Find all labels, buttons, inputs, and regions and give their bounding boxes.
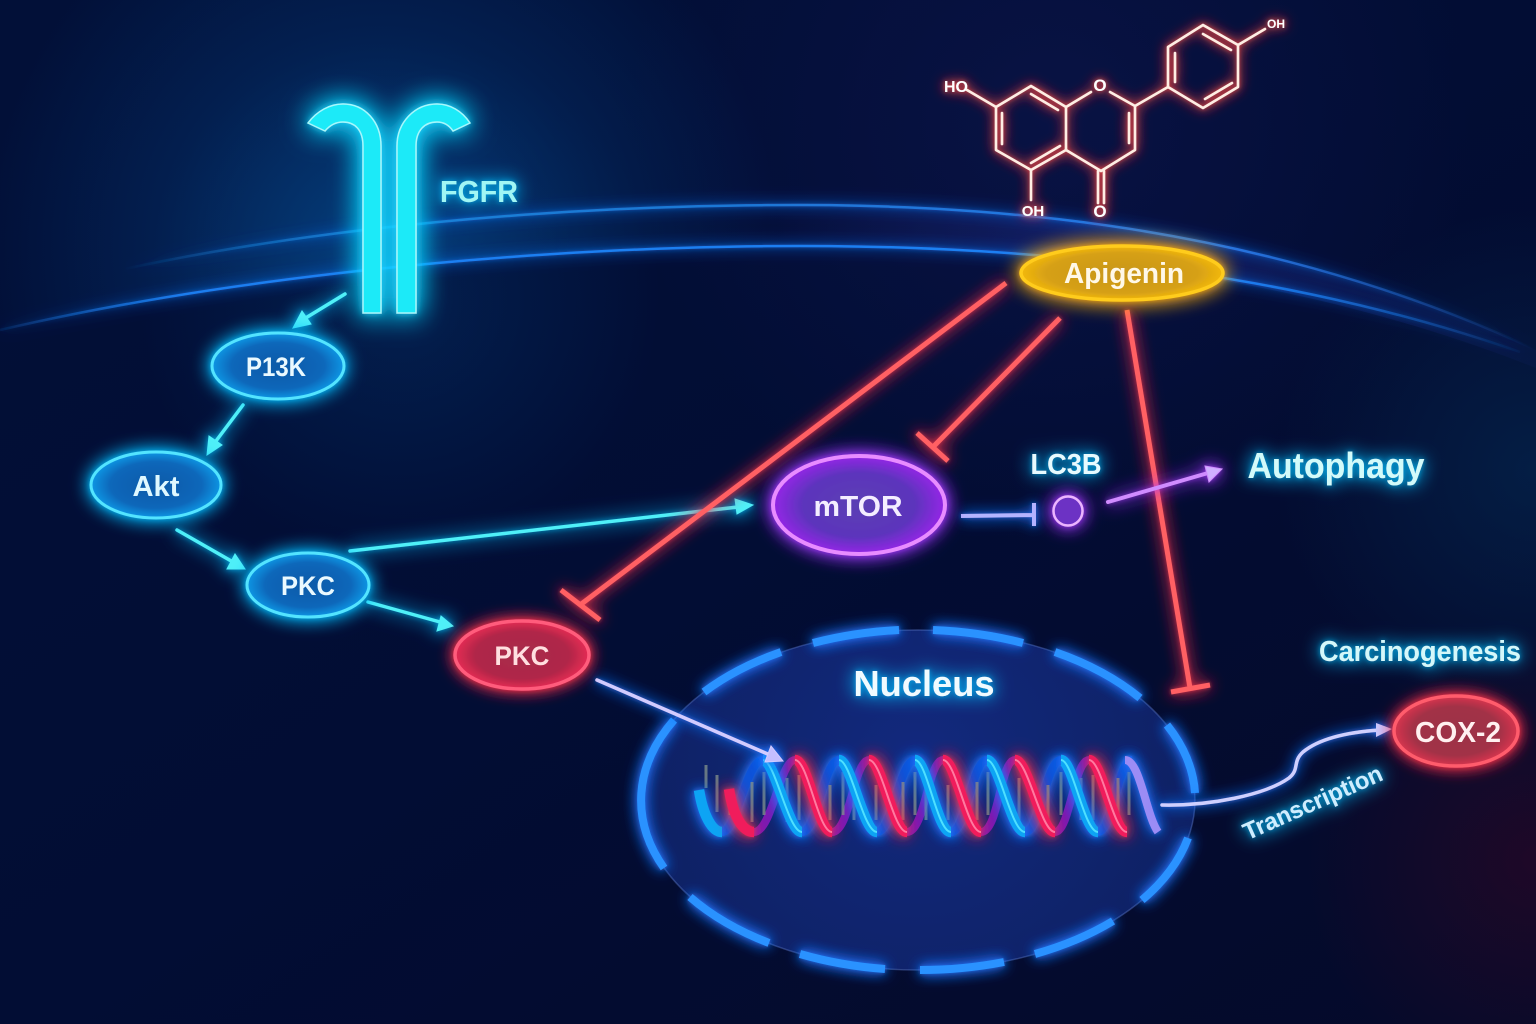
node: mTOR: mTOR — [814, 491, 903, 523]
receptor: FGFR — [308, 104, 470, 313]
label: LC3B: LC3B — [1030, 449, 1102, 481]
inhibition: Apigenin to nucleus — [1127, 310, 1210, 692]
apigenin molecule — [944, 17, 1285, 221]
arrow: transcription — [1162, 723, 1392, 805]
label: Autophagy: Autophagy — [1248, 445, 1424, 486]
label: Transcription: Transcription — [1239, 760, 1387, 846]
node: PKC — [247, 553, 369, 617]
arrow: LC3B to Autophagy — [1108, 466, 1222, 502]
node: Apigenin — [1021, 246, 1223, 300]
end strand — [1125, 760, 1158, 832]
apigenin molecule: HO — [944, 79, 968, 96]
nucleus — [641, 630, 1195, 970]
apigenin molecule: O — [1093, 76, 1107, 95]
node: LC3B dot — [1054, 496, 1082, 526]
activation arrows: FGFR to P13K to Akt to PKC — [177, 294, 345, 569]
apigenin molecule: OH — [1022, 203, 1044, 220]
label: Carcinogenesis: Carcinogenesis — [1319, 636, 1521, 668]
node: PKC: PKC — [281, 571, 335, 601]
label: Nucleus: Nucleus — [854, 663, 994, 704]
node: Apigenin: Apigenin — [1064, 258, 1184, 290]
DNA helix — [699, 760, 1158, 832]
node: red PKC — [455, 621, 589, 689]
apigenin molecule: O — [1093, 202, 1107, 221]
arrow: PKC to mTOR — [350, 499, 753, 551]
base pairs — [706, 765, 1129, 822]
node: Akt: Akt — [132, 471, 180, 503]
inhibition: mTOR to LC3B — [961, 503, 1034, 526]
arrow: PKC to red PKC — [368, 602, 453, 631]
node: P13K: P13K — [246, 352, 306, 382]
node: COX-2 — [1394, 696, 1518, 766]
front red strand — [729, 760, 1127, 832]
rear strands — [722, 760, 1132, 832]
node: mTOR — [773, 456, 945, 554]
arrow: red PKC to DNA — [597, 680, 783, 762]
node: Akt — [91, 452, 221, 518]
label: FGFR: FGFR — [440, 174, 518, 209]
front blue strand — [699, 760, 1098, 832]
node: COX-2: COX-2 — [1415, 717, 1501, 749]
cell membrane — [0, 205, 1536, 368]
inhibition: Apigenin to red PKC — [561, 283, 1006, 620]
apigenin molecule: OH — [1267, 17, 1285, 31]
node: P13K — [212, 333, 344, 399]
node: red PKC: PKC — [494, 641, 550, 671]
inhibition: Apigenin to mTOR — [917, 318, 1060, 461]
